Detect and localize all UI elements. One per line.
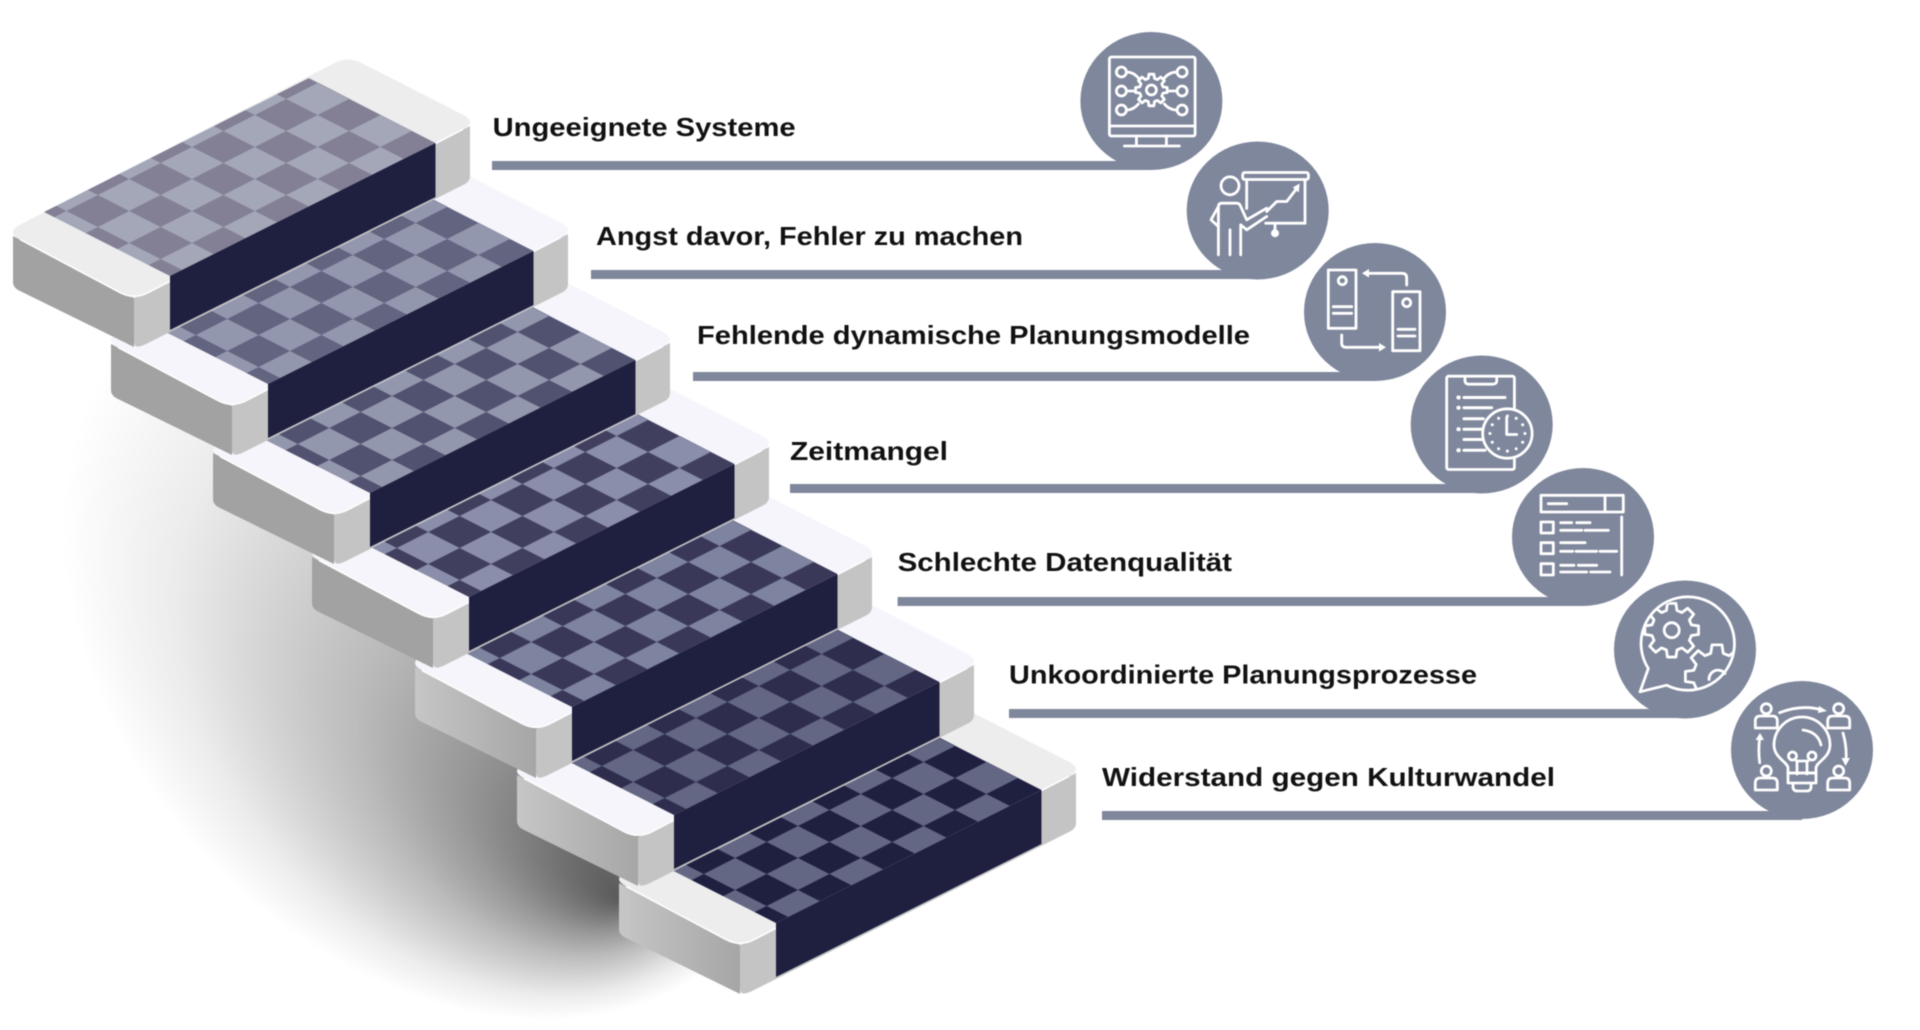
label 7: Widerstand gegen Kulturwandel — [1102, 762, 1555, 792]
item 6: Unkoordinierte Planungsprozesse — [1009, 580, 1756, 718]
icon circle 2 — [1187, 142, 1329, 280]
leader line 2 — [591, 270, 1258, 279]
label 6: Unkoordinierte Planungsprozesse — [1009, 660, 1477, 690]
leader line 4 — [790, 484, 1482, 493]
step 2 — [111, 168, 568, 455]
label 5: Schlechte Datenqualität — [898, 547, 1232, 577]
icon circle 4 — [1411, 356, 1553, 494]
staircase — [13, 60, 1076, 994]
item 1: Ungeeignete Systeme — [492, 32, 1222, 170]
icon: clipboard with clock — [1447, 376, 1532, 470]
label 3: Fehlende dynamische Planungsmodelle — [697, 320, 1250, 350]
icon: data list window — [1541, 495, 1623, 575]
icon: monitor with gear — [1109, 57, 1195, 146]
leader line 5 — [898, 597, 1584, 606]
leader line 6 — [1009, 709, 1685, 718]
step 5 — [415, 491, 872, 778]
step 7 — [619, 707, 1076, 994]
leader line 7 — [1102, 811, 1802, 820]
leader line 1 — [492, 161, 1152, 170]
icon circle 3 — [1304, 243, 1446, 381]
stair drop shadow — [0, 250, 900, 1030]
step 6 — [517, 599, 974, 886]
step 3 — [213, 277, 670, 564]
label 2: Angst davor, Fehler zu machen — [596, 221, 1023, 251]
icon circle 6 — [1614, 580, 1756, 718]
step 4 — [312, 381, 769, 668]
icon: presenter with chart — [1211, 172, 1308, 255]
icon: speech bubble with gears — [1638, 594, 1736, 694]
icon: exchanging servers — [1328, 269, 1420, 352]
item 2: Angst davor, Fehler zu machen — [591, 142, 1329, 280]
step 1 — [13, 60, 470, 347]
icon: lightbulb with people — [1755, 704, 1850, 791]
item 5: Schlechte Datenqualität — [898, 468, 1654, 606]
label 1: Ungeeignete Systeme — [493, 112, 796, 142]
item 3: Fehlende dynamische Planungsmodelle — [693, 243, 1446, 381]
item 7: Widerstand gegen Kulturwandel — [1102, 681, 1873, 820]
icon circle 5 — [1512, 468, 1654, 606]
label 4: Zeitmangel — [790, 436, 948, 466]
item 4: Zeitmangel — [790, 356, 1553, 494]
icon circle 1 — [1080, 32, 1222, 170]
icon circle 7 — [1731, 681, 1873, 819]
leader line 3 — [693, 372, 1375, 381]
